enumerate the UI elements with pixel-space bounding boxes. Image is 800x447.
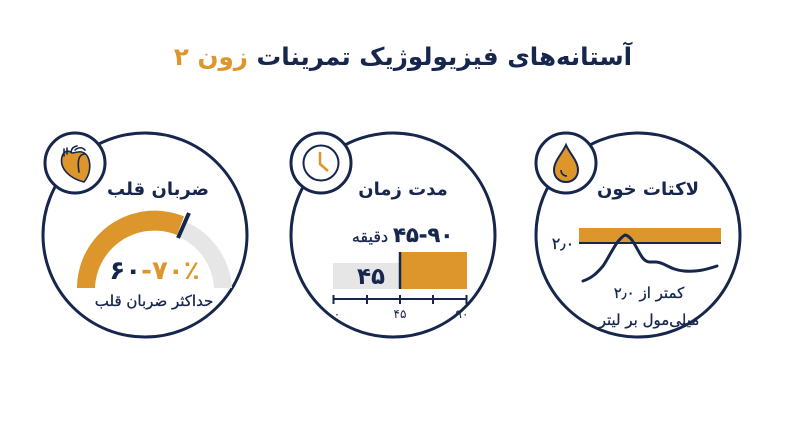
icon: drop	[536, 133, 596, 193]
lactate caption: کمتر از ۲٫۰	[614, 284, 685, 302]
panel: heart rate	[43, 133, 247, 337]
title: آستانه‌های فیزیولوژیک تمرینات زون ۲	[174, 41, 633, 72]
panel: duration	[291, 133, 495, 337]
heading: duration: مدت زمان	[358, 179, 448, 200]
heading: blood lactate: لاکتات خون	[597, 179, 699, 200]
axis: ۴۵	[394, 307, 406, 321]
bar chart	[333, 252, 467, 290]
lactate caption	[598, 284, 699, 329]
axis: ۰	[334, 307, 340, 321]
heading: heart rate: ضربان قلب	[107, 179, 209, 200]
lactate caption: میلی‌مول بر لیتر	[598, 311, 699, 329]
axis: ۹۰	[456, 307, 468, 321]
gauge chart	[77, 211, 232, 288]
duration range: ۴۵-۹۰ دقیقه	[352, 223, 453, 247]
panel: blood lactate	[536, 133, 740, 337]
gauge value: ۶۰-۷۰٪	[109, 256, 200, 286]
gauge caption: حداکثر ضربان قلب	[95, 292, 213, 310]
icon: clock	[291, 133, 351, 193]
bar chart: ۴۵	[357, 264, 385, 290]
line chart	[552, 228, 721, 281]
axis	[333, 295, 468, 321]
line chart: ۲٫۰	[552, 234, 574, 253]
icon: heart	[45, 133, 105, 193]
